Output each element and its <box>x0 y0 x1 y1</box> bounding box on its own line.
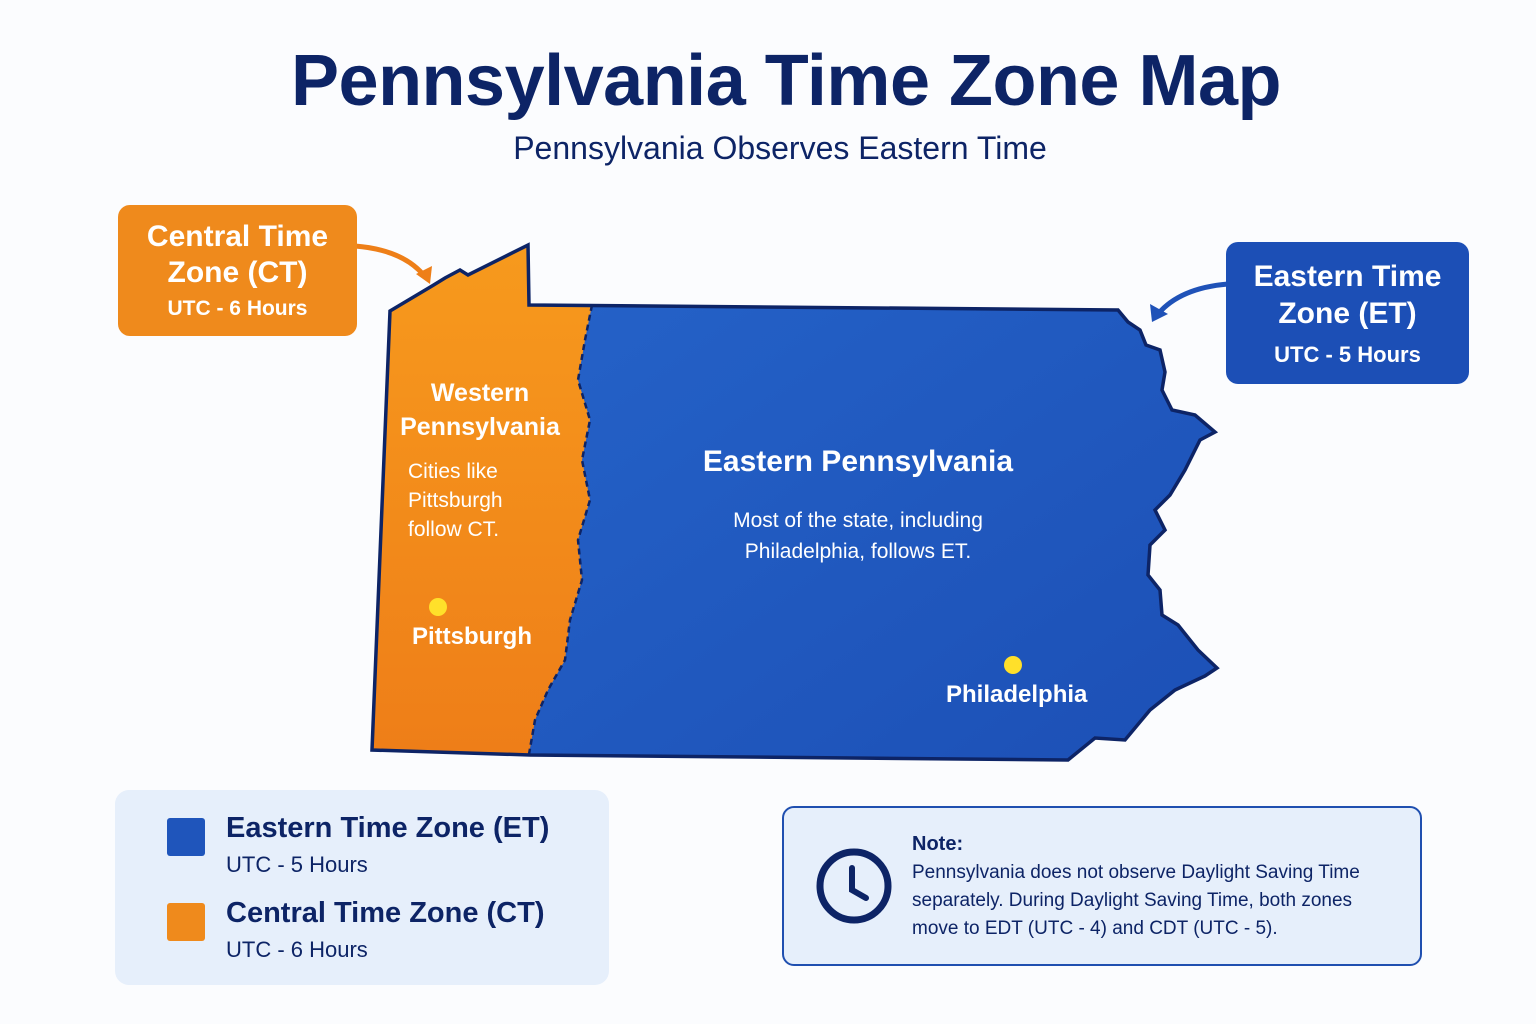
legend: ET: UTC - 5 Hours <box>226 852 368 877</box>
text: Eastern Pennsylvania <box>703 445 1013 478</box>
callout: ET: Zone (ET) <box>1278 297 1417 330</box>
callout: CT: UTC - 6 Hours <box>167 297 308 320</box>
note text: Pennsylvania does not observe Daylight Saving Time separately. During Daylight Saving Time, both zones move to EDT (UTC - 4) and CDT (UTC - 5). <box>912 862 1360 939</box>
arrow: ET <box>1158 284 1228 314</box>
Philadelphia dot <box>1004 656 1022 674</box>
note box <box>782 806 1422 966</box>
region: western PA (orange) <box>360 240 1260 770</box>
callout: CT <box>118 205 357 336</box>
text: Pittsburgh <box>412 623 532 650</box>
map <box>357 242 1226 762</box>
text: follow CT. <box>408 518 499 541</box>
callout: ET <box>1226 242 1469 384</box>
callout: CT: Zone (CT) <box>168 256 307 289</box>
Pittsburgh dot <box>429 598 447 616</box>
legend: CT: UTC - 6 Hours <box>226 937 368 962</box>
map labels <box>400 379 560 441</box>
text: Most of the state, including <box>733 509 983 532</box>
callout: CT: Central Time <box>147 220 328 253</box>
arrow: CT <box>355 246 426 278</box>
note text: Note: <box>912 833 963 855</box>
callout: ET: Eastern Time <box>1254 260 1441 293</box>
legend: ET: Eastern Time Zone (ET) <box>226 812 549 844</box>
legend <box>115 790 609 985</box>
text: Philadelphia <box>946 681 1087 708</box>
legend: CT <box>167 897 544 962</box>
title: Pennsylvania Time Zone Map <box>291 41 1281 121</box>
map labels: Western <box>431 379 529 407</box>
text: Philadelphia, follows ET. <box>745 540 971 563</box>
legend: CT: Central Time Zone (CT) <box>226 897 544 929</box>
subtitle: Pennsylvania Observes Eastern Time <box>513 130 1047 166</box>
text: Cities like <box>408 460 498 483</box>
map labels: Pennsylvania <box>400 413 560 441</box>
icon: clock <box>816 848 892 924</box>
legend: ET <box>167 812 549 877</box>
callout: ET: UTC - 5 Hours <box>1274 342 1421 367</box>
text: Pittsburgh <box>408 489 503 512</box>
